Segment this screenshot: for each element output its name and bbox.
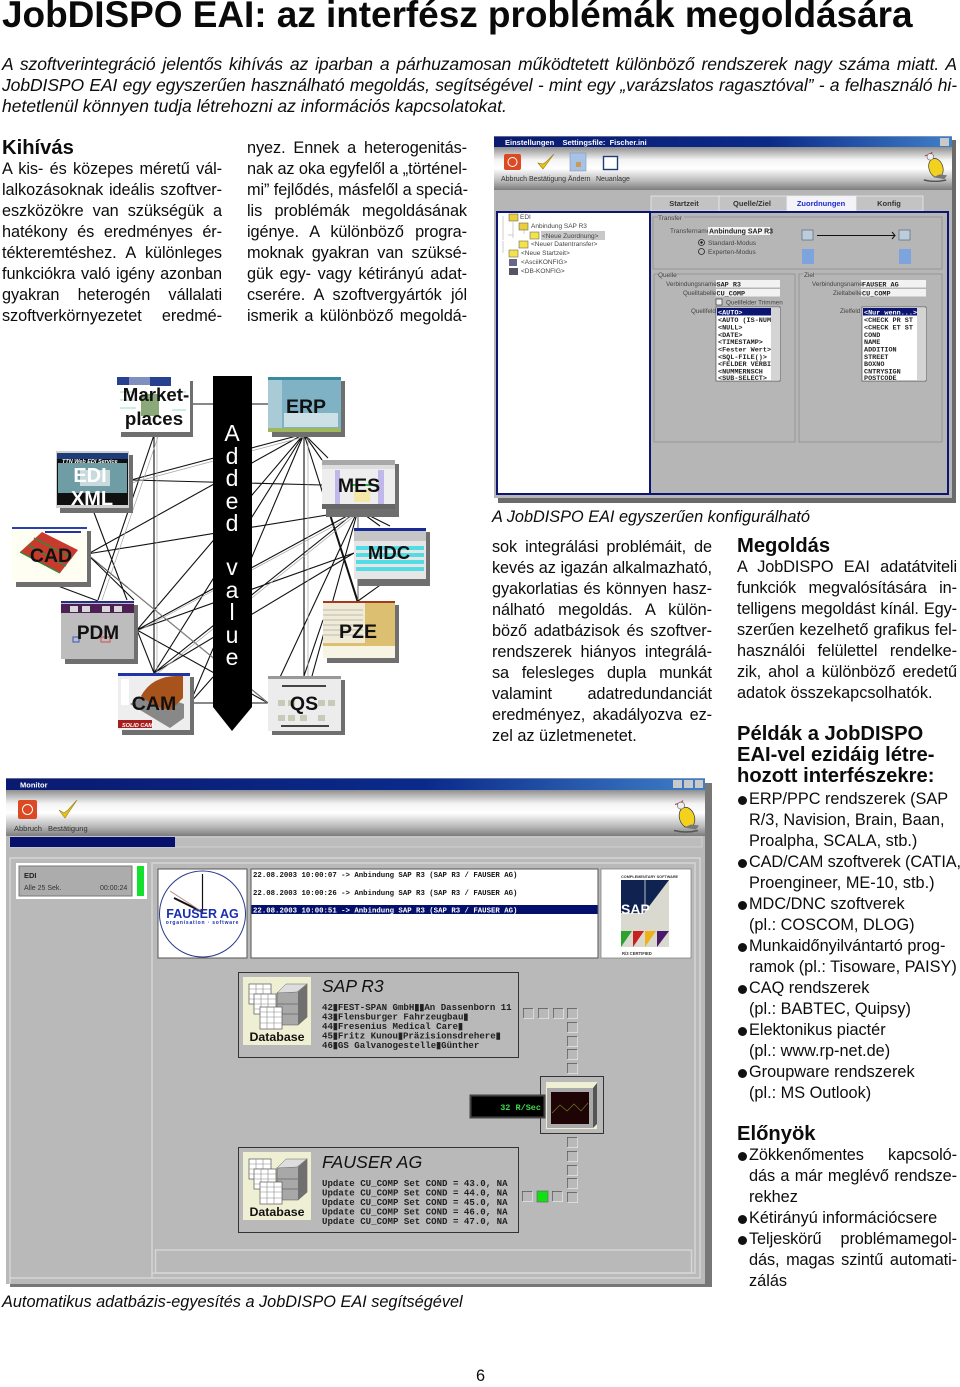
tabs: Zuordnungen (797, 199, 846, 208)
navy frame with tree panel: EDI (520, 214, 531, 221)
navy frame with tree panel: <Neue Startzeit> (521, 250, 570, 257)
signal squares lower (522, 1137, 578, 1203)
text column: Megoldás (737, 535, 957, 702)
tabs: Startzeit (669, 199, 699, 208)
text column: integration continued: sa felesleges dupla munkát (492, 664, 712, 682)
logo: SAP certified: R/3 CERTIFIED (622, 951, 652, 956)
arrow: added value: d (226, 443, 238, 469)
toolbar: Abbruch (14, 824, 42, 833)
card: MES: MES (338, 475, 380, 497)
panel: transfer settings: Transfername (670, 228, 711, 235)
arrow: added value (213, 376, 252, 731)
arrow: added value: d (226, 510, 238, 536)
list: Példák: Groupware rendszerek (749, 1063, 915, 1081)
arrow: added value: l (229, 599, 235, 625)
list: Példák: (pl.: BABTEC, Quipsy) (749, 1000, 911, 1018)
panel: SAP R3 database: SAP R3 (322, 976, 384, 996)
text column: Kihívás: funkciókra való igény azonban (2, 265, 222, 283)
source and target field lists: ADDITION (864, 346, 897, 354)
card: ERP (268, 377, 345, 437)
heading: Megoldás: Megoldás (737, 535, 830, 557)
heading: Előnyök: Előnyök (737, 1123, 816, 1145)
source and target field lists (666, 280, 926, 383)
panel: FAUSER AG database: Database (249, 1205, 305, 1219)
panel: transfer settings: Transfer (658, 215, 683, 222)
panel: SAP R3 database: 42▮FEST-SPAN GmbH▮▮An Dassenborn 11 (322, 1002, 512, 1013)
text column: Megoldás: adatok összekapcsolhatók. (737, 684, 932, 702)
card: ERP: ERP (286, 396, 326, 418)
panel: FAUSER AG database: Update CU_COMP Set COND = 45.0, NA (322, 1197, 508, 1208)
text column: Megoldás: szerűen kezelhető grafikus fel- (737, 621, 957, 639)
source and target field lists: CU_COMP (716, 290, 745, 298)
arrow: added value: A (224, 420, 240, 446)
navy frame with tree panel: <Neue Zuordnung> (542, 233, 599, 240)
list: Példák: Proengineer, ME-10, stb.) (749, 874, 935, 892)
panel: transfer settings (653, 214, 942, 442)
monitor icon with rate display: 32 R/Sec (500, 1103, 541, 1113)
source and target field lists: CNTRYSIGN (864, 368, 901, 376)
list: Példák: (pl.: COSCOM, DLOG) (749, 916, 915, 934)
panel: SAP R3 database: 46▮GS Galvanogestelle▮Günther (322, 1040, 479, 1051)
list: Előnyök: Kétirányú információcsere (749, 1209, 937, 1227)
navy frame with tree panel: <AsciiKONFIG> (521, 259, 567, 266)
clock: organisation · software (166, 920, 239, 926)
text column: integration continued: rendszerek hiányos integrálá- (492, 643, 712, 661)
toolbar: Bestätigung (48, 824, 88, 833)
intro text: hetetlenül könnyen tudja létrehozni az információs kapcsolatokat. (2, 96, 507, 116)
source and target field lists: <NULL> (718, 324, 742, 332)
card: CAM (118, 673, 194, 735)
text column: Kihívás: hatékony és eredményes ér- (2, 223, 222, 241)
list: Előnyök: dás a már meglévő rendsze- (749, 1167, 957, 1185)
status card: EDI: 00:00:24 (100, 885, 127, 892)
card: MES (322, 460, 399, 517)
arrow: added value: e (226, 644, 238, 670)
card: PDM (61, 601, 138, 664)
source and target field lists: Verbindungsname (666, 281, 717, 288)
card: EDI XML: TTN Web EDI Service (62, 459, 118, 465)
list: Példák: Elektonikus piactér (749, 1021, 886, 1039)
navy frame with tree panel (497, 212, 948, 494)
list: Előnyök: Teljeskörű problémamegol- (749, 1230, 957, 1248)
arrow: added value: v (226, 554, 238, 580)
tabs: Quelle/Ziel (733, 199, 771, 208)
panel: transfer settings: Ziel (804, 272, 815, 279)
text column: Megoldás: zik, ahol a különböző eredetű (737, 663, 957, 681)
card: PDM: PDM (77, 623, 119, 644)
toolbar: Neuanlage (596, 176, 630, 183)
text column: integration continued: gyakorlatias és könnyen hasz- (492, 580, 712, 598)
intro text: JobDISPO EAI egy egyszerűen használható megoldás, segítségével - mint egy „varázslatos ragasztóval” - a felhasználó hi- (2, 75, 957, 95)
logo: SAP certified: COMPLEMENTARY SOFTWARE (621, 875, 679, 879)
title bar (6, 778, 705, 790)
tabs (651, 196, 923, 212)
source and target field lists: Zielfeld (840, 308, 861, 315)
heading: Kihívás: Kihívás (2, 137, 74, 159)
card: MDC (354, 528, 430, 586)
source and target field lists: STREET (864, 354, 888, 362)
text column: Kihívás continued: mi” fejlődés, másfelől a speciá- (247, 181, 468, 199)
toolbar: Ändern (568, 175, 591, 183)
diagram: added value network (12, 376, 430, 735)
text column: integration continued: böző adatbázisok és szoftver- (492, 622, 712, 640)
connection lines (50, 404, 390, 705)
card: CAM: SOLID CAM (122, 723, 153, 729)
panel: FAUSER AG database: Update CU_COMP Set COND = 47.0, NA (322, 1216, 508, 1227)
progress bar (10, 837, 702, 847)
card: Marketplaces (117, 377, 193, 437)
list: Példák: R/3, Navision, Brain, Baan, (749, 811, 944, 829)
toolbar (494, 147, 952, 190)
list: Előnyök: Zökkenőmentes kapcsoló- (749, 1146, 957, 1164)
text column: Kihívás: tékteremtéshez. A különleges (2, 244, 222, 262)
toolbar: Abbruch (501, 176, 527, 183)
source and target field lists: Zieltabelle (833, 290, 862, 297)
card: CAD: CAD (30, 545, 72, 567)
text column: integration continued: eredményez, akadályozva ez- (492, 706, 712, 724)
list: Előnyök: rekhez (749, 1188, 798, 1206)
text column: integration continued: nálható megoldás. A külön- (492, 601, 712, 619)
text column: Megoldás: funkciók megvalósítására in- (737, 579, 957, 597)
monitor icon with rate display (470, 1076, 604, 1134)
text column: Kihívás continued: igénye. A különböző progra- (247, 223, 467, 241)
source and target field lists: FAUSER AG (862, 282, 899, 290)
text column: Kihívás continued: ismerik a különböző megoldá- (247, 307, 467, 325)
text column: Kihívás continued: nak az oka egyfelől a „történel- (247, 160, 467, 178)
text column: Megoldás: telligens megoldást kínál. Egy- (737, 600, 957, 618)
panel: transfer settings: Anbindung SAP R3 (709, 228, 773, 236)
list: Előnyök: dás, magas szintű automati- (749, 1251, 957, 1269)
source and target field lists: <CHECK PR ST (864, 317, 913, 325)
text column: Kihívás: eszközökre van szükségük a (2, 202, 222, 220)
list: Előnyök (737, 1123, 957, 1290)
caption: configuration screenshot: A JobDISPO EAI egyszerűen konfigurálható (492, 508, 810, 526)
source and target field lists: <AUTO (IS-NUM (718, 317, 771, 325)
heading: Példák: hozott interfészekre: (737, 765, 934, 787)
title bar: Einstellungen Settingsfile: Fischer.ini (505, 138, 647, 147)
status card: EDI: EDI (24, 871, 37, 880)
source and target field lists: <NUMMERNSCH (718, 368, 763, 376)
heading: Példák: EAI-vel ezidáig létre- (737, 744, 934, 766)
source and target field lists: Verbindungsname (812, 281, 863, 288)
card: PZE (323, 601, 399, 663)
source and target field lists: CU_COMP (862, 290, 891, 298)
text column: integration continued (492, 538, 712, 745)
card: EDI XML: EDI (73, 465, 107, 487)
panel frames (10, 858, 700, 1284)
panel: SAP R3 database: 43▮Flensburger Fahrzeugbau▮ (322, 1012, 468, 1022)
source and target field lists: <Nur wenn...> (864, 310, 917, 318)
text column: Kihívás: szoftverkörnyezetet eredmé- (2, 307, 222, 325)
source and target field lists: SAP R3 (716, 282, 741, 290)
source and target field lists: NAME (864, 339, 880, 347)
source and target field lists: BOXNO (864, 361, 884, 369)
text column: Kihívás continued: cserére. A szoftvergyártók jól (247, 286, 467, 304)
log list (251, 869, 598, 958)
text column: integration continued: sok integrálási problémáit, de (492, 538, 712, 556)
panel: FAUSER AG database (238, 1148, 518, 1232)
status card: EDI (16, 863, 147, 899)
text column: Kihívás: A kis- és közepes méretű vál- (2, 160, 222, 178)
card: Marketplaces: Market- (123, 384, 189, 405)
text column: integration continued: zel az üzletmenetet. (492, 727, 637, 745)
list: Példák: Proalpha, SCALA, stb.) (749, 832, 917, 850)
source and target field lists: POSTCODE (864, 375, 897, 383)
navy frame with tree panel: <Neuer Datentransfer> (531, 241, 598, 248)
list: Példák: CAD/CAM szoftverek (CATIA, (749, 853, 960, 871)
logo: SAP certified (601, 869, 691, 958)
source and target field lists: <AUTO> (718, 310, 742, 318)
source and target field lists: Quelltabelle (683, 290, 717, 297)
text column: Kihívás continued: nyez. Ennek a heterogenitás- (247, 139, 467, 157)
status card: EDI: Alle 25 Sek. (24, 885, 61, 892)
title bar (494, 136, 952, 148)
panel: FAUSER AG database: Update CU_COMP Set COND = 44.0, NA (322, 1188, 508, 1198)
title bar: Monitor (20, 780, 48, 790)
heading: Példák: Példák a JobDISPO (737, 723, 923, 745)
card: CAD (12, 527, 91, 587)
log list: 22.08.2003 10:00:26 -> Anbindung SAP R3 (SAP R3 / FAUSER AG) (253, 890, 517, 898)
log list: 22.08.2003 10:00:07 -> Anbindung SAP R3 (SAP R3 / FAUSER AG) (253, 872, 517, 880)
panel: transfer settings: Standard-Modus (708, 240, 757, 247)
tabs: Konfig (877, 199, 901, 208)
intro text: A szoftverintegráció jelentős kihívás az iparban a párhuzamosan működtetett különböző rendszerek nagy száma miatt. A (2, 54, 957, 74)
source and target field lists: <SUB-SELECT> (718, 375, 767, 383)
text column: Kihívás continued: gük egy- vagy kétirányú adat- (247, 265, 467, 283)
caption: monitor screenshot: Automatikus adatbázis-egyesítés a JobDISPO EAI segítségével (2, 1293, 463, 1311)
source and target field lists: <CHECK ET ST (864, 324, 913, 332)
text column: Kihívás continued: moknak gyakran van szüksé- (247, 244, 467, 262)
text column: Kihívás: lalkozásoknak ideális szoftver- (2, 181, 222, 199)
text column: Megoldás: használói felülettel rendelke- (737, 642, 957, 660)
card: MDC: MDC (368, 542, 410, 563)
list: Példák: CAQ rendszerek (749, 979, 869, 997)
card: QS: QS (290, 693, 318, 715)
list: Példák: MDC/DNC szoftverek (749, 895, 905, 913)
card: EDI XML: XML (71, 488, 113, 510)
source and target field lists: COND (864, 332, 880, 340)
text column: Kihívás (2, 137, 222, 325)
list: Példák: (pl.: www.rp-net.de) (749, 1042, 890, 1060)
card: CAM: CAM (132, 693, 176, 715)
card: EDI XML (56, 451, 133, 513)
text column: Megoldás: A JobDISPO EAI adatátviteli (737, 558, 957, 576)
arrow: added value: d (226, 465, 238, 491)
panel: SAP R3 database: 44▮Fresenius Medical Care▮ (322, 1021, 463, 1032)
arrow: added value: u (226, 622, 238, 648)
text column: integration continued: kevés az igazán alkalmazható, (492, 559, 712, 577)
panel: transfer settings: Experten-Modus (708, 249, 756, 256)
page number: 6 (476, 1367, 485, 1385)
clock: FAUSER AG (166, 907, 239, 921)
arrow: added value: e (226, 488, 238, 514)
list: Példák (737, 723, 960, 1102)
clock (158, 869, 247, 958)
source and target field lists: <Fester Wert> (718, 346, 771, 354)
panel: SAP R3 database (238, 972, 518, 1058)
logo: SAP certified: SAP (621, 901, 650, 917)
source and target field lists: Quellfeld (691, 308, 716, 315)
toolbar: Bestätigung (529, 176, 566, 183)
card: Marketplaces: places (125, 408, 183, 429)
arrow: added value: a (226, 577, 239, 603)
text column: Kihívás: gyakran heterogén vállalati (2, 286, 222, 304)
panel: FAUSER AG database: Update CU_COMP Set COND = 43.0, NA (322, 1178, 508, 1189)
intro text (1, 54, 957, 116)
source and target field lists: <DATE> (718, 332, 742, 340)
card: PZE: PZE (339, 621, 377, 643)
card: QS (268, 676, 345, 735)
text column: Kihívás continued: lis problémák megoldásának (247, 202, 467, 220)
log list: 22.08.2003 10:00:51 -> Anbindung SAP R3 (SAP R3 / FAUSER AG) (253, 908, 517, 916)
screenshot: configuration window (494, 136, 956, 503)
panel: FAUSER AG database: FAUSER AG (322, 1152, 422, 1172)
heading: Példák (737, 723, 934, 787)
toolbar (6, 790, 705, 836)
list: Példák: ERP/PPC rendszerek (SAP (749, 790, 948, 808)
panel: SAP R3 database: 45▮Fritz Kunou▮Präzisionsdrehere▮ (322, 1030, 501, 1042)
navy frame with tree panel: <DB-KONFIG> (521, 268, 565, 275)
screenshot: monitor window (6, 778, 712, 1287)
text column: integration continued: valamint adatredundanciát (492, 685, 712, 703)
source and target field lists: <SQL-FILE()> (718, 354, 767, 362)
source and target field lists: <TIMESTAMP> (718, 339, 763, 347)
list: Előnyök: zálás (749, 1272, 787, 1290)
list: Példák: ramok (pl.: Tisoware, PAISY) (749, 958, 957, 976)
text column: Kihívás continued (247, 139, 468, 325)
list: Példák: (pl.: MS Outlook) (749, 1084, 871, 1102)
navy frame with tree panel: Anbindung SAP R3 (531, 223, 587, 230)
signal squares upper (523, 1008, 578, 1074)
source and target field lists: <FELDER VERBI (718, 361, 771, 369)
panel: FAUSER AG database: Update CU_COMP Set COND = 46.0, NA (322, 1206, 508, 1218)
source and target field lists: Quellfelder Trimmen (726, 300, 783, 306)
list: Példák: Munkaidőnyilvántartó prog- (749, 937, 945, 955)
panel: SAP R3 database: Database (249, 1030, 305, 1044)
panel: transfer settings: Quelle (658, 272, 677, 279)
